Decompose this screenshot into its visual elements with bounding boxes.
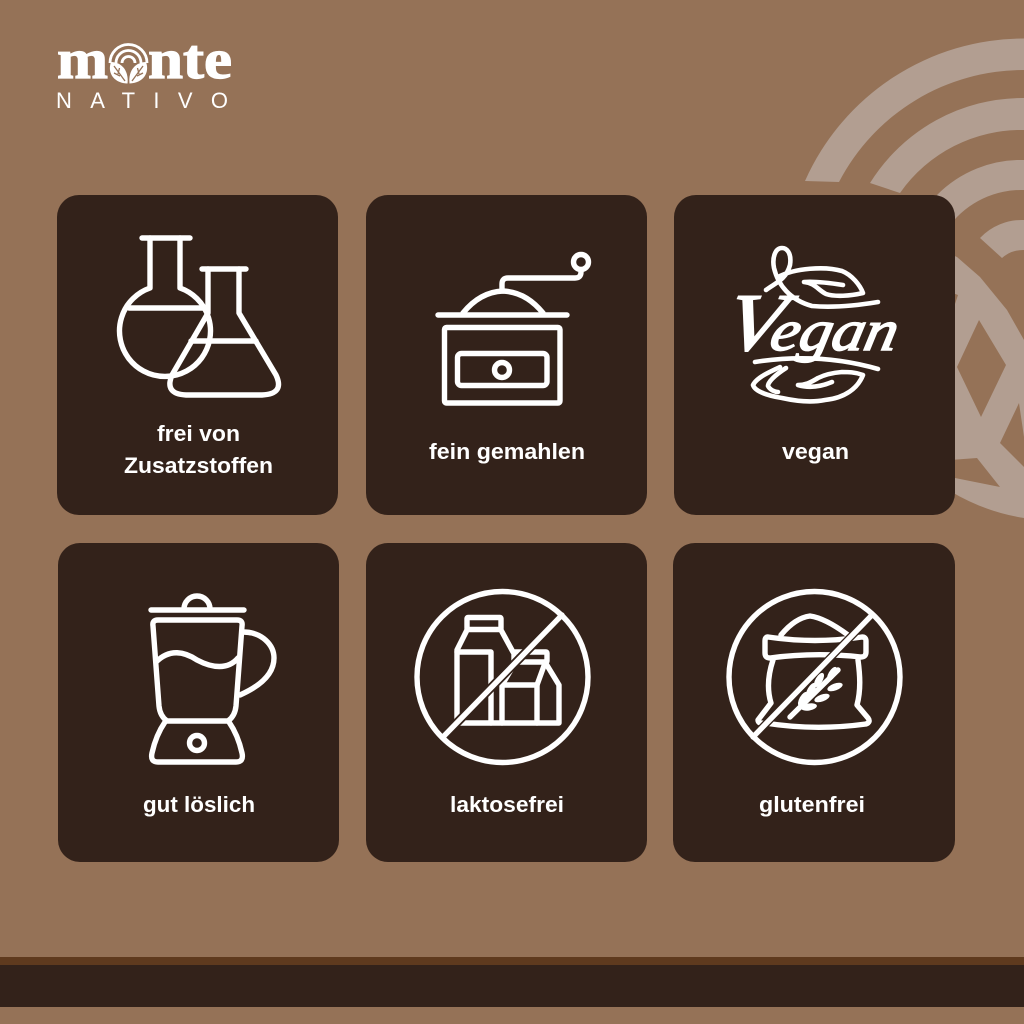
label: laktosefrei bbox=[450, 792, 564, 817]
card background bbox=[674, 195, 955, 515]
panel: gut löslich bbox=[58, 543, 339, 862]
logo: monte nativo bbox=[56, 29, 232, 113]
footer bands bbox=[0, 957, 1024, 1007]
icon: blender bbox=[151, 596, 274, 762]
icon: flasks bbox=[120, 238, 279, 395]
label: glutenfrei bbox=[759, 792, 865, 817]
icon: crossed-out grain sack bbox=[729, 592, 900, 762]
logo subline: NATIVO bbox=[56, 88, 228, 113]
label: vegan bbox=[782, 439, 849, 464]
icon: crossed-out milk cartons bbox=[417, 592, 588, 762]
logo wordmark m: m bbox=[57, 29, 108, 91]
card background bbox=[673, 543, 955, 862]
icon: vegan lettering with leaves bbox=[718, 248, 910, 401]
panel: glutenfrei bbox=[673, 543, 955, 862]
panel: frei von Zusatzstoffen bbox=[57, 195, 338, 515]
label: Zusatzstoffen bbox=[124, 453, 273, 478]
icon: vegan lettering with leaves: Vegan bbox=[718, 278, 910, 369]
logo emblem bbox=[110, 45, 147, 84]
panel: fein gemahlen bbox=[366, 195, 647, 515]
card background bbox=[366, 195, 647, 515]
panel: vegan bbox=[674, 195, 955, 515]
label: fein gemahlen bbox=[429, 439, 585, 464]
card background bbox=[366, 543, 647, 862]
panel: laktosefrei bbox=[366, 543, 647, 862]
card background bbox=[57, 195, 338, 515]
card background bbox=[58, 543, 339, 862]
label bbox=[124, 421, 273, 478]
icon: coffee grinder bbox=[438, 254, 588, 403]
background emblem watermark bbox=[805, 38, 1024, 518]
logo wordmark nte: nte bbox=[148, 29, 232, 91]
label: gut löslich bbox=[143, 792, 255, 817]
label: frei von bbox=[157, 421, 240, 446]
